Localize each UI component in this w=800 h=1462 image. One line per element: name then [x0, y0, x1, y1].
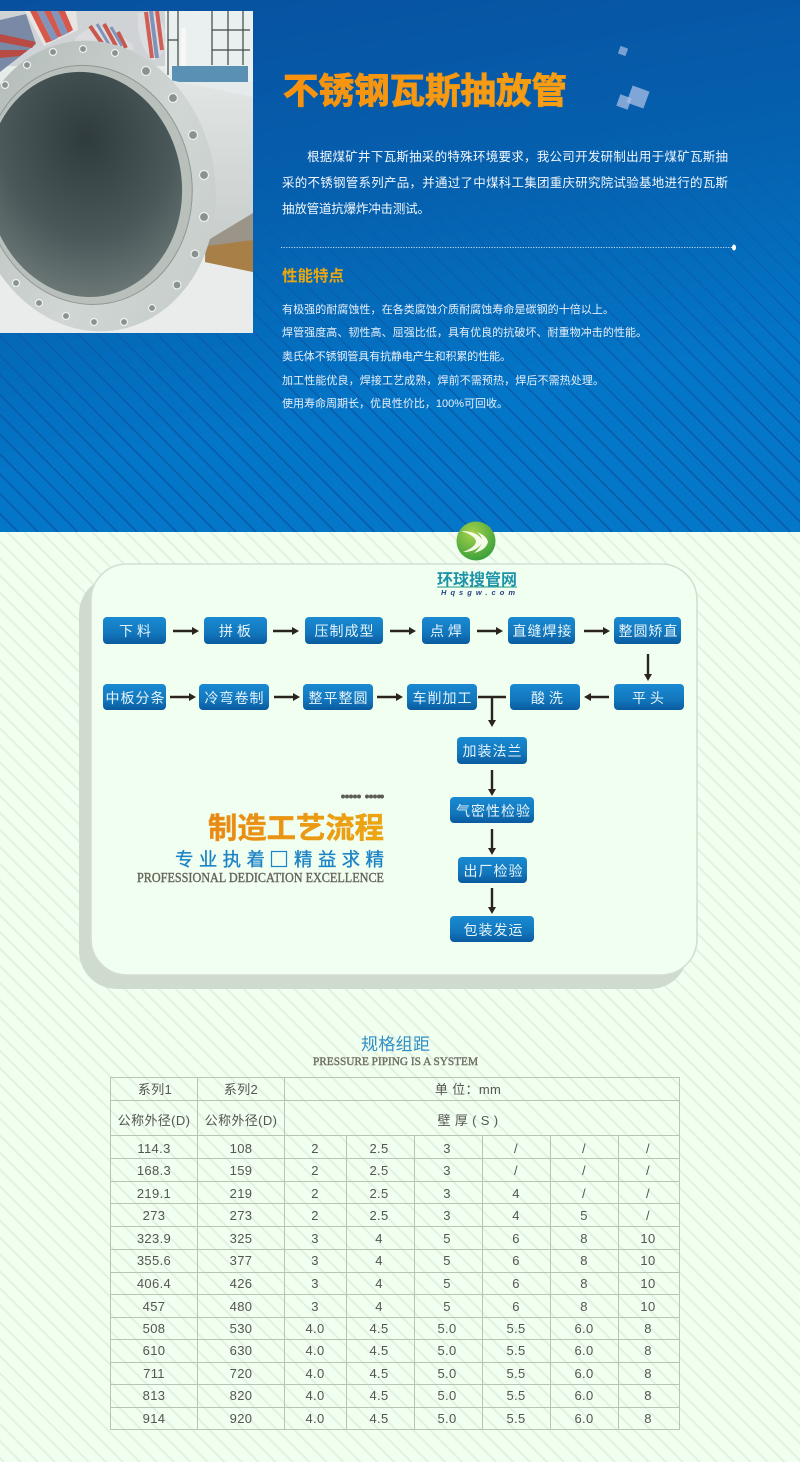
- intro paragraph: 根据煤矿井下瓦斯抽采的特殊环境要求，我公司开发研制出用于煤矿瓦斯抽: [307, 149, 728, 164]
- table rows: 508: [143, 1321, 165, 1336]
- subheading: professional dedication: 精益求精: [294, 849, 384, 870]
- table rows: 5.0: [437, 1366, 457, 1381]
- table rows: 377: [230, 1253, 252, 1268]
- process steps row 1: [103, 617, 681, 644]
- process steps row 2: 车削加工: [412, 690, 472, 706]
- table rows: /: [646, 1141, 650, 1156]
- panel: process flow card: [79, 564, 697, 989]
- table header: 壁 厚 ( S ): [438, 1113, 498, 1128]
- table rows: 8: [580, 1276, 588, 1291]
- table rows: 5: [443, 1276, 451, 1291]
- table rows: 4: [375, 1231, 383, 1246]
- table rows: 159: [230, 1163, 252, 1178]
- icon: logo emblem: [456, 522, 496, 560]
- table rows: 480: [230, 1299, 252, 1314]
- table rows: 2.5: [369, 1141, 389, 1156]
- table rows: 10: [640, 1231, 656, 1246]
- table rows: 2: [311, 1208, 319, 1223]
- table rows: 8: [644, 1343, 652, 1358]
- table rows: 3: [443, 1208, 451, 1223]
- table rows: 3: [443, 1163, 451, 1178]
- table rows: 4: [375, 1253, 383, 1268]
- heading: performance features: 性能特点: [282, 266, 344, 285]
- table rows: 114.3: [137, 1141, 171, 1156]
- table rows: 630: [230, 1343, 252, 1358]
- table rows: 8: [644, 1321, 652, 1336]
- table rows: 610: [143, 1343, 165, 1358]
- table rows: 820: [230, 1388, 252, 1403]
- table rows: /: [514, 1141, 518, 1156]
- features list: 奥氏体不锈钢管具有抗静电产生和积累的性能。: [282, 349, 511, 363]
- table rows: 2.5: [369, 1186, 389, 1201]
- flange ring: [0, 40, 214, 332]
- logo wordmark: 环球搜管网: [437, 570, 517, 589]
- table rows: /: [646, 1186, 650, 1201]
- table rows: 426: [230, 1276, 252, 1291]
- table header: [118, 1082, 501, 1128]
- table rows: 3: [443, 1141, 451, 1156]
- table rows: 10: [640, 1299, 656, 1314]
- process steps row 2: [103, 684, 684, 710]
- table rows: 10: [640, 1276, 656, 1291]
- table rows: 711: [143, 1366, 165, 1381]
- dotted divider with end dot: [281, 244, 736, 250]
- table rows: 273: [143, 1208, 165, 1223]
- table rows: 5.0: [437, 1411, 457, 1426]
- table rows: 219.1: [137, 1186, 171, 1201]
- table rows: 325: [230, 1231, 252, 1246]
- table rows: 2.5: [369, 1208, 389, 1223]
- table rows: [137, 1141, 656, 1426]
- table rows: 5: [580, 1208, 588, 1223]
- table rows: 6.0: [574, 1321, 594, 1336]
- background: pale green lower area: [0, 532, 800, 1462]
- english tagline: PROFESSIONAL DEDICATION EXCELLENCE: [137, 870, 384, 885]
- table rows: 530: [230, 1321, 252, 1336]
- process steps row 2: 整平整圆: [308, 690, 368, 706]
- table rows: 3: [311, 1253, 319, 1268]
- table header: 单 位：mm: [435, 1082, 501, 1097]
- table rows: 5.5: [506, 1343, 526, 1358]
- intro paragraph: 抽放管道抗爆炸冲击测试。: [282, 201, 430, 216]
- table rows: 273: [230, 1208, 252, 1223]
- table rows: 8: [580, 1231, 588, 1246]
- process steps row 2: 冷弯卷制: [204, 690, 264, 706]
- table rows: 3: [311, 1299, 319, 1314]
- table rows: 457: [143, 1299, 165, 1314]
- table header: 公称外径(D): [118, 1113, 190, 1128]
- table rows: 4.5: [369, 1411, 389, 1426]
- table rows: 6.0: [574, 1366, 594, 1381]
- process steps row 2: 中板分条: [106, 690, 164, 706]
- table rows: 6.0: [574, 1411, 594, 1426]
- intro paragraph: 采的不锈钢管系列产品，并通过了中煤科工集团重庆研究院试验基地进行的瓦斯: [282, 175, 728, 190]
- features list: 加工性能优良，焊接工艺成熟，焊前不需预热，焊后不需热处理。: [282, 373, 604, 387]
- table rows: 4: [512, 1186, 520, 1201]
- table rows: 323.9: [137, 1231, 171, 1246]
- arrows: flow connectors: [170, 627, 652, 914]
- process steps row 2: 酸 洗: [531, 690, 563, 706]
- process steps row 1: 整圆矫直: [618, 623, 678, 639]
- table rows: /: [514, 1163, 518, 1178]
- table rows: 4: [512, 1208, 520, 1223]
- table header: 系列1: [138, 1082, 172, 1097]
- table rows: /: [646, 1163, 650, 1178]
- table rows: 813: [143, 1388, 165, 1403]
- table rows: 219: [230, 1186, 252, 1201]
- photo: stainless steel pipe with flange: [0, 11, 253, 351]
- subheading: professional dedication: [175, 849, 384, 870]
- table rows: 4.5: [369, 1366, 389, 1381]
- table rows: 5.0: [437, 1343, 457, 1358]
- flange bolt holes: [2, 46, 208, 326]
- table rows: 4: [375, 1299, 383, 1314]
- process steps row 1: 压制成型: [314, 623, 374, 639]
- process steps row 1: 点 焊: [430, 623, 462, 639]
- table rows: 4: [375, 1276, 383, 1291]
- table rows: 5: [443, 1299, 451, 1314]
- table rows: 108: [230, 1141, 252, 1156]
- process steps row 1: 拼 板: [219, 623, 251, 639]
- heading: specification table: 规格组距: [361, 1035, 430, 1054]
- table rows: /: [582, 1186, 586, 1201]
- table rows: 720: [230, 1366, 252, 1381]
- table rows: /: [646, 1208, 650, 1223]
- process steps column: 出厂检验: [464, 863, 522, 879]
- tarp bundles: [0, 11, 166, 72]
- table rows: 4.5: [369, 1321, 389, 1336]
- table rows: 5.0: [437, 1388, 457, 1403]
- table rows: 355.6: [137, 1253, 171, 1268]
- intro paragraph: [282, 149, 728, 216]
- process steps row 1: 下 料: [119, 623, 151, 639]
- table rows: 4.0: [305, 1321, 325, 1336]
- decorative squares: [616, 46, 650, 110]
- table rows: 5: [443, 1253, 451, 1268]
- features list: 使用寿命周期长，优良性价比，100%可回收。: [282, 396, 508, 410]
- subheading: professional dedication: 专业执着: [175, 849, 265, 870]
- features list: 焊管强度高、韧性高、屈强比低，具有优良的抗破坏、耐重物冲击的性能。: [282, 325, 647, 339]
- table rows: 3: [311, 1276, 319, 1291]
- decorative dots: [341, 794, 384, 798]
- table rows: 5.5: [506, 1366, 526, 1381]
- table rows: 2.5: [369, 1163, 389, 1178]
- table rows: 168.3: [137, 1163, 171, 1178]
- table rows: 4.0: [305, 1343, 325, 1358]
- table rows: 10: [640, 1253, 656, 1268]
- heading: manufacturing process flow: 制造工艺流程: [208, 812, 384, 845]
- process steps column: 加装法兰: [462, 743, 522, 759]
- table rows: 5.5: [506, 1321, 526, 1336]
- table rows: 914: [143, 1411, 165, 1426]
- table rows: 5.5: [506, 1388, 526, 1403]
- table rows: 5.0: [437, 1321, 457, 1336]
- logo wordmark: Hqsgw.com: [441, 588, 515, 597]
- table rows: 2: [311, 1186, 319, 1201]
- background: blue header band: [0, 0, 800, 532]
- table rows: 6: [512, 1231, 520, 1246]
- table: pipe dimensions: [110, 1077, 680, 1430]
- table rows: 3: [311, 1231, 319, 1246]
- table rows: 4.0: [305, 1366, 325, 1381]
- table header: 系列2: [224, 1082, 258, 1097]
- table rows: /: [582, 1163, 586, 1178]
- table rows: 6: [512, 1253, 520, 1268]
- table rows: 2: [311, 1163, 319, 1178]
- table rows: 8: [580, 1299, 588, 1314]
- table rows: 920: [230, 1411, 252, 1426]
- logo wordmark: [437, 570, 517, 597]
- process steps column: 包装发运: [464, 922, 522, 938]
- table rows: 4.5: [369, 1388, 389, 1403]
- table rows: 5.5: [506, 1411, 526, 1426]
- table rows: 4.0: [305, 1411, 325, 1426]
- table rows: /: [582, 1141, 586, 1156]
- table rows: 6: [512, 1276, 520, 1291]
- table header: 公称外径(D): [205, 1113, 277, 1128]
- process steps column: 气密性检验: [456, 803, 530, 819]
- table rows: 406.4: [137, 1276, 171, 1291]
- table rows: 6: [512, 1299, 520, 1314]
- features list: [282, 302, 647, 410]
- table rows: 3: [443, 1186, 451, 1201]
- table rows: 6.0: [574, 1388, 594, 1403]
- process steps row 2: 平 头: [632, 690, 664, 706]
- table grid: [110, 1077, 680, 1430]
- title: 不锈钢瓦斯抽放管: [283, 71, 567, 111]
- process steps column: [450, 737, 534, 942]
- english subheading: PRESSURE PIPING IS A SYSTEM: [313, 1054, 478, 1068]
- table rows: 5: [443, 1231, 451, 1246]
- process steps row 1: 直缝焊接: [512, 623, 572, 639]
- table rows: 8: [644, 1388, 652, 1403]
- table rows: 4.0: [305, 1388, 325, 1403]
- features list: 有极强的耐腐蚀性，在各类腐蚀介质耐腐蚀寿命是碳钢的十倍以上。: [282, 302, 614, 316]
- table rows: 8: [644, 1411, 652, 1426]
- table rows: 8: [644, 1366, 652, 1381]
- table rows: 4.5: [369, 1343, 389, 1358]
- table rows: 6.0: [574, 1343, 594, 1358]
- table rows: 8: [580, 1253, 588, 1268]
- table rows: 2: [311, 1141, 319, 1156]
